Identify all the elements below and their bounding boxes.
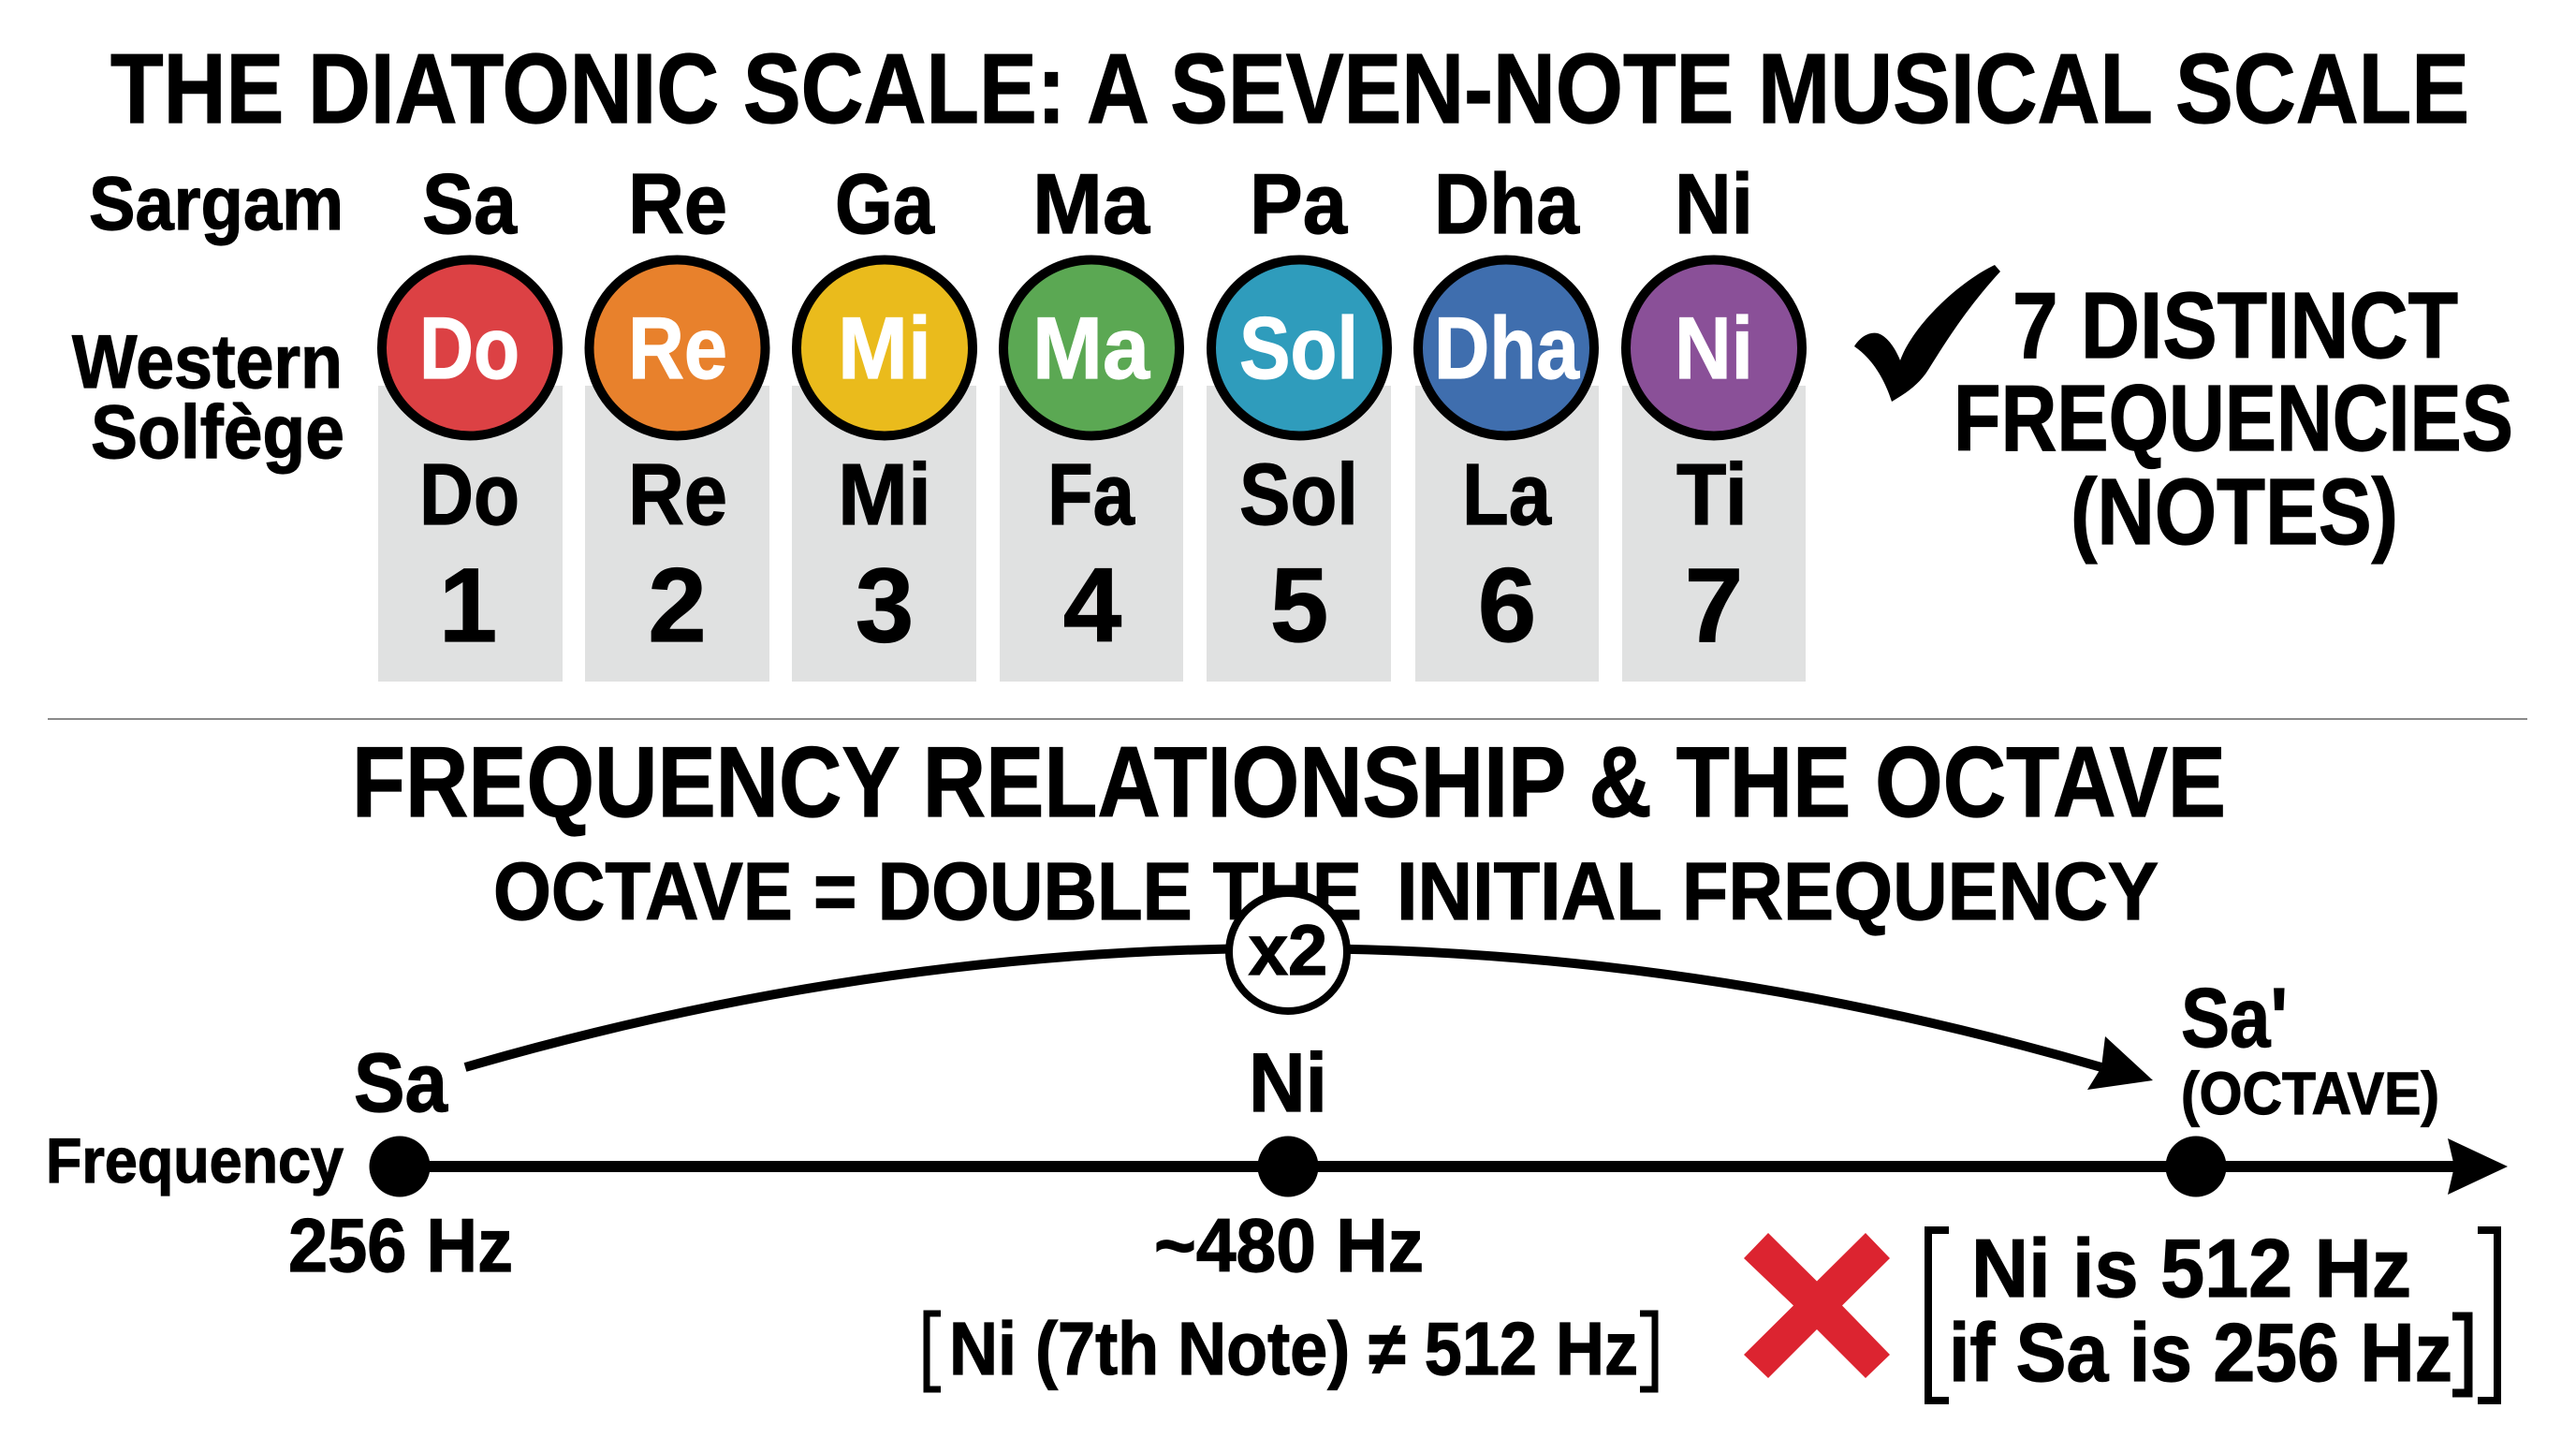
- subheading: octave definition: OCTAVE = DOUBLE THE: [493, 846, 1362, 937]
- column 5: Pa: Sol: [1239, 299, 1358, 397]
- heading: frequency relationship: FREQUENCY RELATIONSHIP & THE OCTAVE: [352, 726, 2226, 838]
- column 6: Dha: [1415, 157, 1599, 682]
- column 2: Re: Re: [628, 446, 727, 543]
- column 4: Ma: [1000, 157, 1183, 682]
- icon: checkmark: [1854, 265, 2000, 402]
- column 3: Ga: Mi: [838, 446, 931, 543]
- point label: Ni: Ni: [1249, 1035, 1327, 1129]
- column 3: Ga: 3: [856, 547, 914, 664]
- column 2: Re: 2: [648, 547, 707, 664]
- column 1: Sa: [378, 157, 563, 682]
- point label: Sa octave: Sa': [2181, 972, 2288, 1065]
- subheading: octave definition: INITIAL FREQUENCY: [1397, 846, 2159, 937]
- callout: false claim: Ni is 512 Hz: [1971, 1222, 2411, 1314]
- row labels: Western: [72, 320, 343, 404]
- column 5: Pa: [1207, 157, 1391, 682]
- point label: Sa: Sa: [354, 1035, 448, 1129]
- column 5: Pa: Pa: [1250, 157, 1348, 252]
- column 2: Re: Re: [628, 157, 727, 252]
- column 1: Sa: Do: [419, 299, 520, 397]
- column 6: Dha: La: [1462, 446, 1552, 543]
- column 2: Re: Re: [628, 299, 727, 397]
- icon: x2 badge: x2: [1249, 911, 1327, 990]
- column 2: Re: [585, 157, 769, 682]
- column 1: Sa: Do: [419, 446, 520, 543]
- column 7: Ni: Ti: [1676, 446, 1748, 543]
- note: Ni not 512 Hz: Ni (7th Note) ≠ 512 Hz: [949, 1307, 1638, 1390]
- column 5: Pa: Sol: [1239, 446, 1358, 543]
- callout: 7 distinct frequencies: (NOTES): [2071, 460, 2398, 565]
- callout: 7 distinct frequencies: 7 DISTINCT: [2012, 273, 2458, 378]
- value: 256 Hz: 256 Hz: [288, 1204, 513, 1288]
- column 1: Sa: Sa: [422, 157, 518, 252]
- column 7: Ni: 7: [1685, 547, 1743, 664]
- row labels: Sargam: [89, 162, 344, 246]
- column 7: Ni: Ni: [1675, 157, 1753, 252]
- column 4: Ma: Ma: [1032, 157, 1150, 252]
- row labels: [72, 162, 344, 475]
- column 6: Dha: Dha: [1434, 299, 1580, 397]
- frequency axis: [369, 1137, 2508, 1196]
- axis label: Frequency: Frequency: [46, 1125, 344, 1196]
- column 3: Ga: Mi: [838, 299, 931, 397]
- callout: 7 distinct frequencies: [1954, 273, 2513, 565]
- column 3: Ga: [792, 157, 976, 682]
- column 6: Dha: 6: [1478, 547, 1536, 664]
- callout: false claim: if Sa is 256 Hz: [1949, 1306, 2452, 1399]
- icon: x2 badge: [1229, 893, 1347, 1011]
- callout: false claim: [1928, 1222, 2497, 1401]
- column 7: Ni: Ni: [1675, 299, 1753, 397]
- column 5: Pa: 5: [1270, 547, 1328, 664]
- icon: red cross: [1744, 1233, 1890, 1378]
- point label: Sa octave: [2181, 972, 2439, 1127]
- arrow: octave arc: [465, 948, 2153, 1090]
- point label: Sa octave: (OCTAVE): [2181, 1060, 2439, 1127]
- value: 480 Hz: ~480 Hz: [1154, 1204, 1424, 1288]
- column 4: Ma: Ma: [1032, 299, 1150, 397]
- column 4: Ma: Fa: [1047, 446, 1135, 543]
- column 6: Dha: Dha: [1434, 157, 1580, 252]
- column 4: Ma: 4: [1063, 547, 1121, 664]
- column 3: Ga: Ga: [835, 157, 935, 252]
- panel: scale table: [72, 157, 1806, 682]
- column 7: Ni: [1622, 157, 1806, 682]
- row labels: Solfège: [91, 390, 344, 475]
- subheading: octave definition: [493, 846, 2159, 937]
- column 1: Sa: 1: [439, 547, 497, 664]
